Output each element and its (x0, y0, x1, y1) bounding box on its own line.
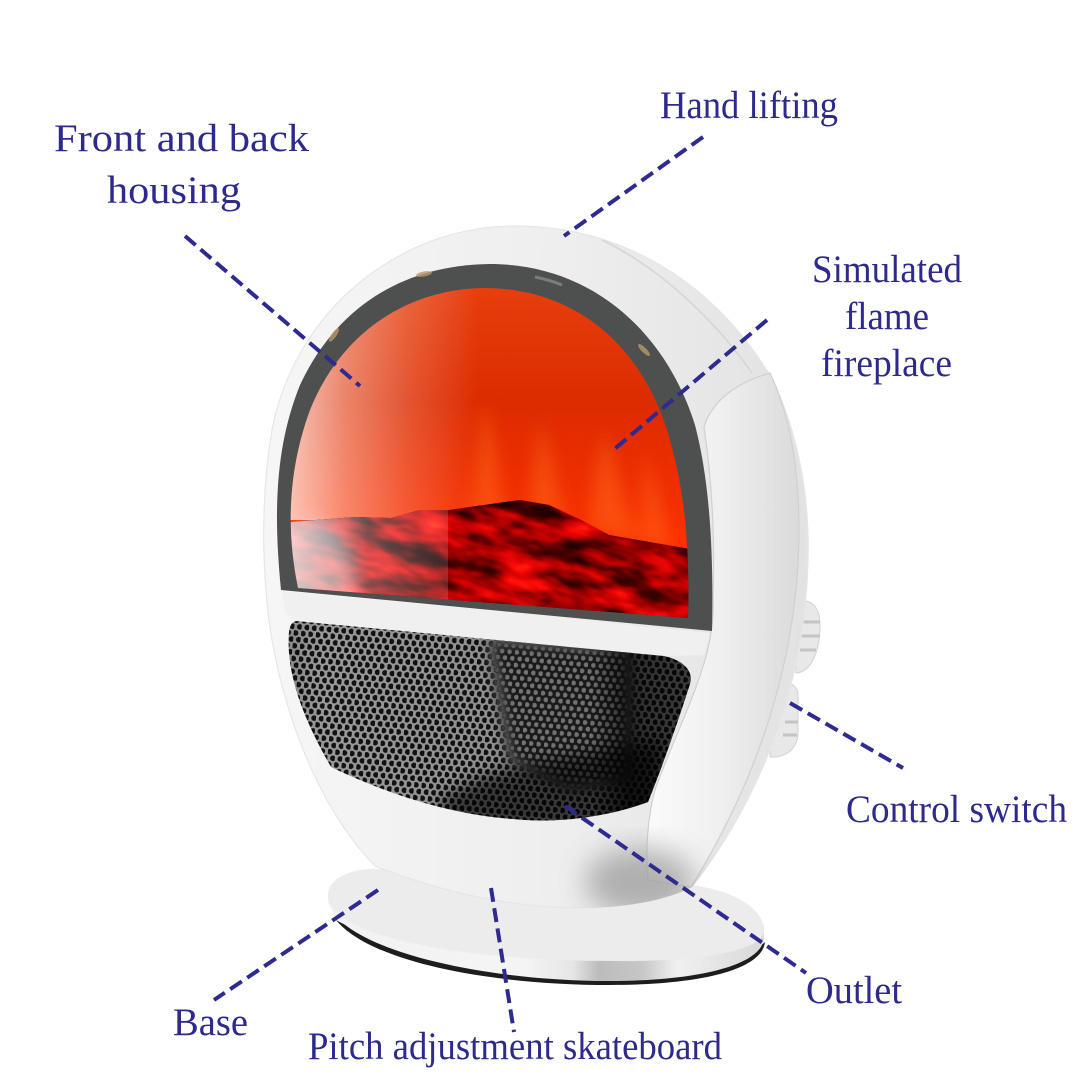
leader line: base (214, 890, 378, 1000)
heating grille (288, 621, 691, 820)
label: base: Base (173, 1001, 248, 1044)
control knobs (770, 601, 820, 757)
leader line: outlet (565, 806, 806, 973)
heater body (264, 226, 808, 908)
window haze reflection (290, 290, 466, 520)
label: control switch: Control switch (846, 788, 1067, 831)
label: simulated flame fireplace: Simulated (812, 248, 962, 291)
leader line: front and back housing (185, 236, 360, 386)
heater base (328, 869, 765, 985)
label: pitch adjustment skateboard: Pitch adjustment skateboard (308, 1025, 722, 1068)
label: simulated flame fireplace: fireplace (821, 342, 952, 385)
frame highlights (327, 270, 651, 357)
leader line: hand lifting (564, 137, 703, 236)
side panel (647, 373, 799, 887)
lower shell shading (585, 848, 695, 916)
burning logs (290, 500, 688, 618)
leader line: simulated flame fireplace (611, 320, 767, 452)
flames (466, 418, 672, 546)
label: hand lifting: Hand lifting (660, 84, 838, 127)
simulated flame display (290, 288, 688, 618)
leader line: pitch adjustment skateboard (491, 888, 514, 1032)
label: simulated flame fireplace: flame (845, 295, 929, 338)
label: front and back housing: Front and back (54, 117, 310, 160)
top highlight seam (602, 240, 752, 373)
label: front and back housing (54, 117, 310, 212)
flame window frame (277, 264, 712, 631)
heater illustration (263, 226, 820, 985)
leader line: control switch (790, 703, 903, 768)
window bottom ledge (282, 591, 710, 656)
label: simulated flame fireplace (812, 248, 962, 385)
label: outlet: Outlet (806, 969, 902, 1012)
label: front and back housing: housing (107, 169, 241, 212)
